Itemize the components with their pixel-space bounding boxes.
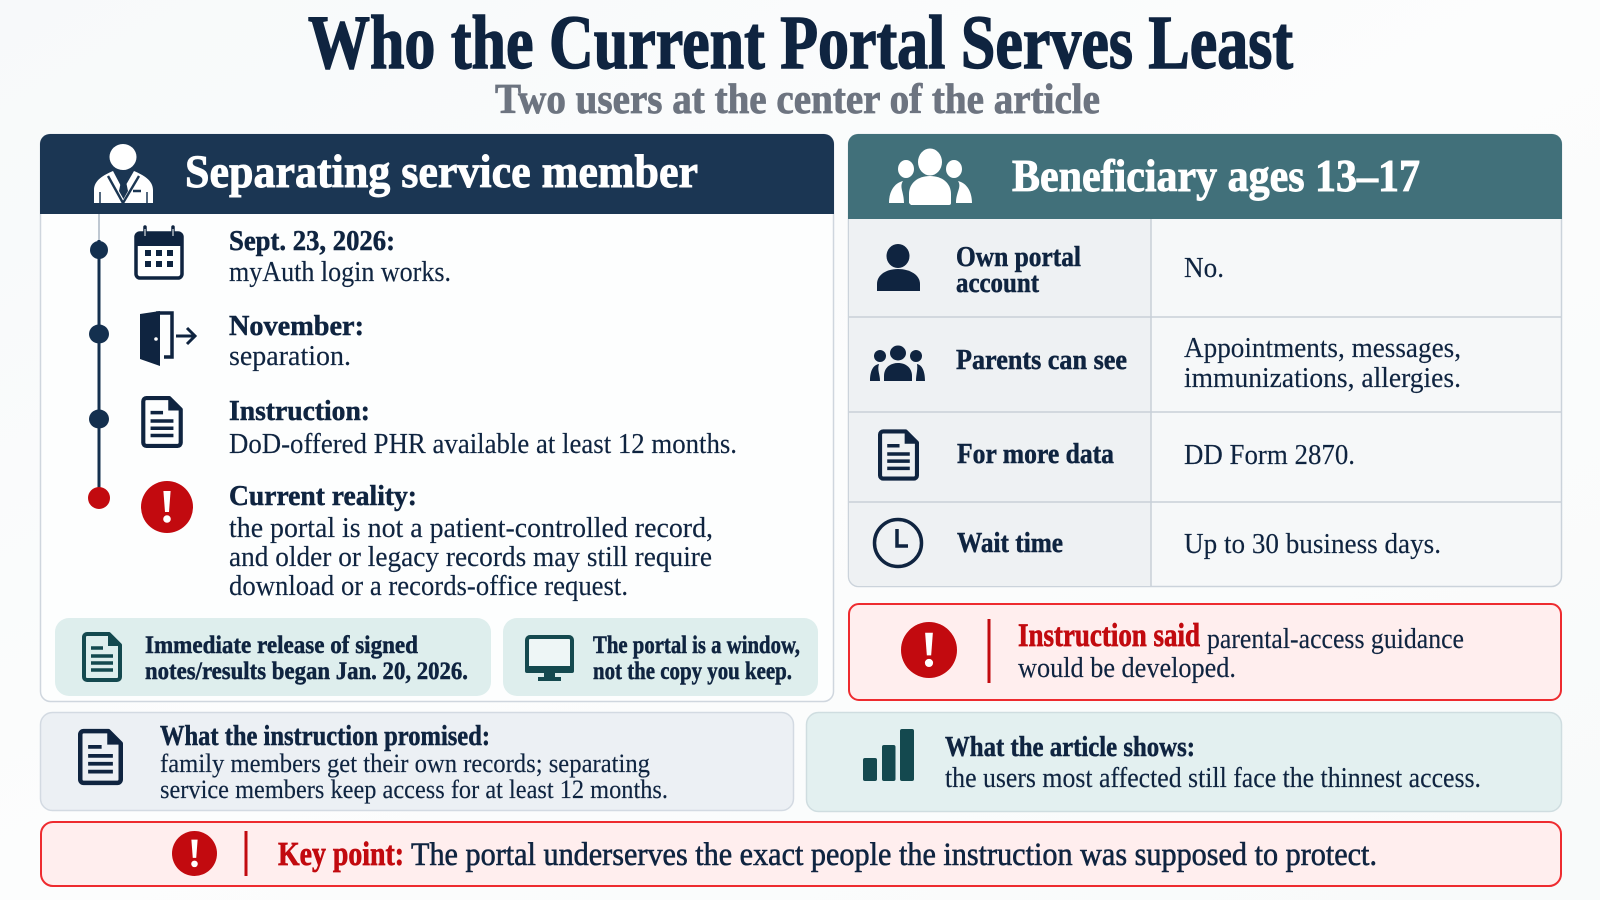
icon: alert (172, 831, 217, 876)
icon: document (84, 634, 120, 680)
icon: monitor (525, 637, 574, 681)
callout: key point: Key point: (278, 836, 404, 873)
card: immediate release (55, 618, 491, 696)
icon: clock (874, 520, 922, 566)
timeline item: Instruction: DoD-offered PHR available at least 12 months. (229, 429, 737, 460)
timeline item: Current reality: Current reality: (229, 480, 417, 512)
row: own portal account (877, 242, 1224, 299)
timeline item: November (229, 310, 364, 372)
callout: instruction said (849, 604, 1561, 700)
row: for more data: DD Form 2870. (1184, 439, 1355, 471)
icon: group (889, 148, 972, 205)
panel header: beneficiary (848, 134, 1562, 219)
icon: document (143, 398, 181, 446)
callout: key point: The portal underserves the exact people the instruction was supposed to protect. (411, 837, 1377, 873)
panel heading: Beneficiary ages 13–17 (1012, 151, 1420, 201)
panel: what the article shows: the users most affected still face the thinnest access. (945, 763, 1481, 794)
icon: alert (141, 481, 193, 533)
row: own portal account: Own portal (956, 242, 1081, 273)
timeline item: Sept. 23: myAuth login works. (229, 257, 451, 288)
row: own portal account: account (956, 268, 1040, 299)
icon: person (877, 244, 920, 291)
timeline item: Current reality: the portal is not a patient-controlled record, (229, 513, 713, 544)
timeline item: November: separation. (229, 341, 351, 372)
icon: parents (870, 346, 925, 381)
icon: calendar (136, 227, 182, 278)
row: wait time (874, 520, 1441, 566)
timeline item: Current reality: and older or legacy records may still require (229, 542, 712, 573)
timeline item: Instruction: Instruction: (229, 395, 370, 427)
panel header: separating service member (40, 134, 834, 214)
row: parents can see: Appointments, messages, (1184, 332, 1461, 364)
panel: what the instruction promised: service members keep access for at least 12 months. (160, 775, 668, 804)
icon: service member (94, 144, 153, 203)
panel: what the instruction promised (40, 712, 794, 810)
row: wait time: Wait time (957, 527, 1063, 559)
panel heading: Separating service member (185, 146, 698, 198)
panel: what the instruction promised: What the instruction promised: (160, 721, 490, 752)
panel: beneficiary ages 13–17 (848, 134, 1562, 586)
timeline item: Instruction (229, 395, 737, 460)
icon: bar chart (863, 729, 914, 781)
row: parents can see: Parents can see (956, 344, 1127, 376)
card: portal is a window (503, 618, 818, 696)
row: for more data (880, 431, 1355, 479)
card: immediate release: Immediate release of signed (145, 632, 418, 659)
row: wait time: Up to 30 business days. (1184, 528, 1441, 560)
icon: document (80, 731, 121, 783)
left column shading (849, 219, 1151, 586)
row: parents can see: immunizations, allergies. (1184, 362, 1461, 394)
timeline item: Sept. 23 (229, 225, 451, 288)
row: parents can see (870, 332, 1461, 394)
panel: separating service member (40, 134, 834, 702)
timeline item: November: November: (229, 310, 364, 342)
timeline item: Current reality (229, 480, 713, 602)
icon: alert (901, 622, 957, 678)
card: immediate release: notes/results began Jan. 20, 2026. (145, 658, 468, 685)
timeline (88, 214, 110, 509)
card: portal is a window: not the copy you keep. (593, 658, 792, 685)
callout: key point (41, 822, 1561, 886)
card: portal is a window: The portal is a window, (593, 632, 800, 659)
panel: what the article shows (806, 712, 1562, 812)
row: for more data: For more data (957, 438, 1114, 470)
icon: exit door (140, 311, 195, 366)
panel: what the instruction promised: family members get their own records; separating (160, 749, 650, 778)
timeline item: Sept. 23: Sept. 23, 2026: (229, 225, 395, 257)
row: own portal account: No. (1184, 252, 1224, 284)
panel: what the article shows: What the article shows: (945, 732, 1195, 763)
callout: instruction said: Instruction said (1018, 618, 1200, 654)
icon: document (880, 431, 917, 479)
title: Who the Current Portal Serves Least (308, 1, 1293, 85)
subtitle: Two users at the center of the article (495, 77, 1100, 123)
timeline item: Current reality: download or a records-office request. (229, 571, 628, 602)
callout: instruction said: parental-access guidance (1207, 623, 1464, 655)
callout: instruction said: would be developed. (1018, 652, 1236, 684)
